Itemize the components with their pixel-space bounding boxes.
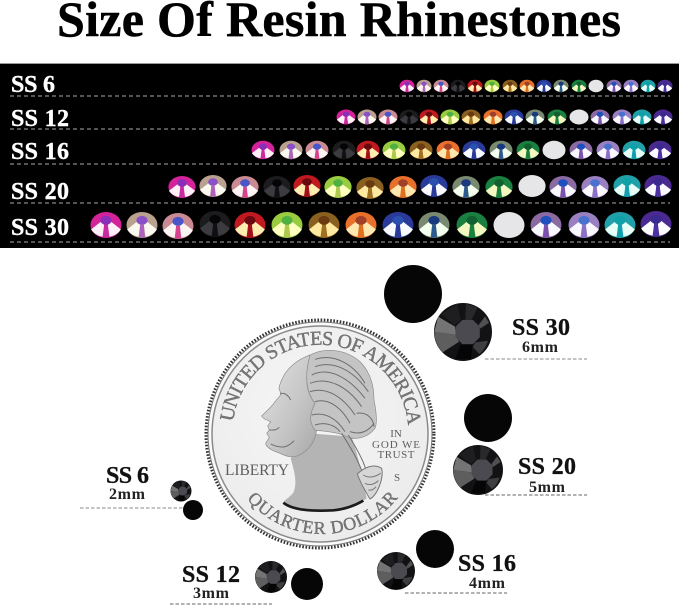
SS 20 comparison stones bbox=[453, 394, 512, 495]
SS 6 label: SS 6 bbox=[106, 463, 149, 489]
row: SS 20 bbox=[10, 175, 672, 205]
row: SS 20: SS 20 bbox=[11, 179, 69, 205]
row: SS 6: SS 6 bbox=[11, 72, 55, 98]
quarter coin bbox=[204, 318, 436, 550]
SS 20 label: SS 20 bbox=[518, 454, 576, 480]
SS 6 label: 2mm bbox=[109, 486, 146, 503]
SS 20 label: 5mm bbox=[529, 479, 566, 496]
coin inscription: motto: S bbox=[394, 472, 400, 484]
SS 12 label: SS 12 bbox=[182, 562, 240, 588]
SS 12 label bbox=[170, 562, 272, 604]
row: SS 12: SS 12 bbox=[11, 106, 69, 132]
coin inscription: motto: IN bbox=[390, 428, 402, 440]
SS 16 comparison stones bbox=[377, 530, 454, 590]
SS 16 label: SS 16 bbox=[458, 551, 516, 577]
Washington portrait bbox=[262, 350, 382, 511]
row: SS 12 bbox=[10, 106, 672, 132]
SS 30 label: SS 30 bbox=[512, 315, 570, 341]
face bbox=[262, 355, 317, 457]
coin inscription: bottom: QUARTER DOLLAR bbox=[249, 492, 398, 534]
SS 6 label bbox=[80, 463, 183, 508]
row: SS 6 bbox=[10, 72, 672, 98]
coin inscription: motto bbox=[372, 428, 420, 484]
row: SS 16: SS 16 bbox=[11, 139, 69, 165]
SS 20 label bbox=[485, 454, 587, 496]
SS 30 label: 6mm bbox=[522, 339, 559, 356]
SS 6 comparison stones bbox=[170, 480, 203, 520]
SS 30 comparison stones bbox=[384, 265, 492, 361]
SS 30 label bbox=[485, 315, 587, 359]
coin inscription: motto: TRUST bbox=[378, 449, 415, 461]
panel: colour size chart bbox=[0, 63, 679, 248]
SS 12 label: 3mm bbox=[193, 585, 230, 602]
SS 16 label: 4mm bbox=[469, 575, 506, 592]
row: SS 30 bbox=[10, 211, 672, 242]
row: SS 30: SS 30 bbox=[11, 215, 69, 241]
coin inscription: Liberty: LIBERTY bbox=[225, 462, 289, 479]
coin inscription: motto: GOD WE bbox=[372, 439, 420, 451]
row: SS 16 bbox=[10, 139, 672, 165]
ribbon bbox=[357, 466, 382, 499]
hair bbox=[307, 350, 376, 438]
SS 16 label bbox=[405, 551, 516, 593]
SS 12 comparison stones bbox=[255, 561, 323, 600]
neck and bust bbox=[283, 433, 367, 511]
coin inscription: top: UNITED STATES OF AMERICA bbox=[220, 331, 420, 426]
